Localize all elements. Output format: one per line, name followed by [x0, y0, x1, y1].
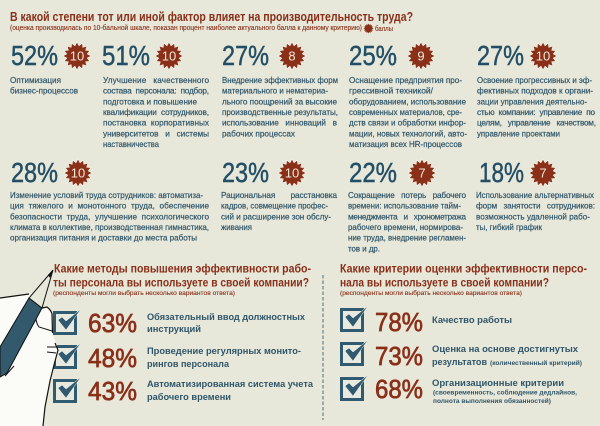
description: дств связи и обработки инфор-	[349, 119, 466, 128]
description: использование инноваций в	[222, 119, 337, 128]
description	[348, 191, 466, 254]
description: Сокращение потерь рабочего	[348, 191, 466, 200]
row: 48%: Проведение регулярных монито-	[147, 346, 301, 357]
row: 48%	[54, 343, 301, 373]
description	[221, 191, 337, 232]
description: университетов и системы	[103, 129, 209, 138]
percentage: 23%	[222, 157, 269, 188]
row: 73%: Оценка на основе достигнутых	[432, 344, 579, 355]
panel: methods	[53, 264, 314, 406]
description: стью компании: управление по	[477, 108, 595, 117]
description: тов и др.	[348, 244, 380, 254]
heading	[53, 264, 311, 290]
description: льного поощрений за высокие	[222, 97, 337, 106]
percentage: 25%	[349, 40, 397, 71]
description: времени: использование тайм-	[348, 202, 461, 211]
description: ты, гибкий график	[476, 223, 542, 232]
badge: score 9: 9	[417, 48, 425, 64]
badge: score 10: 10	[162, 48, 176, 64]
note: (респонденты могли выбрать несколько вариантов ответа)	[53, 289, 235, 297]
row: 73%: (количественный критерий)	[490, 359, 582, 367]
percentage: 52%	[11, 40, 58, 71]
heading: Какие критерии оценки эффективности персо-	[340, 264, 587, 276]
percentage: 18%	[479, 157, 524, 188]
row: 78%	[342, 306, 512, 337]
description: Использование альтернативных	[476, 191, 594, 200]
badge: score 7: 7	[539, 166, 547, 180]
row: 43%	[54, 376, 314, 406]
description: бизнес-процессов	[10, 87, 78, 96]
description	[103, 76, 209, 149]
row: 63%: Обязательный ввод должностных	[147, 312, 306, 323]
percentage: 27%	[477, 40, 524, 71]
description: наставничества	[103, 140, 159, 149]
row: 63%: 63%	[88, 308, 137, 338]
description	[476, 191, 595, 232]
description: сий и расширение зон обслу-	[221, 212, 331, 221]
description: Изменение условий труда сотрудников: автоматиза-	[10, 191, 203, 200]
description: рабочих процессах	[222, 129, 295, 138]
description: живания	[221, 223, 252, 232]
description: зации управления деятельно-	[477, 97, 587, 106]
description: матизация всех HR-процессов	[349, 140, 462, 149]
row: 78%: 78%	[375, 307, 423, 337]
panel: factor 51%	[102, 40, 209, 149]
row: 68%: Организационные критерии	[432, 378, 564, 389]
panel: factor 23%	[221, 157, 337, 232]
description: Внедрение эффективных форм	[222, 76, 338, 85]
description: Рациональная расстановка	[221, 191, 337, 200]
description	[222, 76, 338, 138]
description: мации, новых технологий, авто-	[349, 129, 467, 138]
row: 48%: рингов персонала	[147, 359, 230, 370]
illustration: hand holding pencil	[0, 270, 58, 426]
description: современных материалов, сре-	[349, 108, 462, 117]
row: 68%	[342, 374, 577, 405]
description: Оснащение предприятия про-	[349, 76, 462, 85]
subtitle with score legend	[10, 23, 393, 34]
panel: factor 18%	[476, 157, 595, 232]
badge: score 10	[64, 159, 92, 187]
badge: score 10: 10	[71, 166, 85, 180]
percentage: 28%	[11, 157, 58, 188]
subtitle with score legend: (оценка производилась по 10-бальной шкале, показан процент наиболее актуального балла к данному критерию)	[10, 24, 362, 32]
description	[10, 76, 78, 96]
description: производственные результаты,	[222, 108, 338, 117]
percentage: 22%	[349, 157, 397, 188]
row: 68%: (своевременность, соблюдение дедлайнов,	[433, 388, 577, 396]
row: 43%: рабочего времени	[147, 392, 231, 403]
description: материального и нематериа-	[222, 87, 328, 96]
description: Оптимизация	[10, 76, 61, 85]
description: рабочего времени, нормирова-	[348, 223, 463, 232]
description	[477, 76, 596, 138]
row: 63%	[54, 308, 306, 338]
row: 68%: полнота выполнения обязанностей)	[433, 397, 551, 405]
panel: factor 28%	[10, 157, 209, 243]
row: 73%	[342, 340, 582, 371]
badge: score 10: 10	[536, 48, 550, 64]
description: возможность удаленной рабо-	[476, 212, 590, 221]
description: Улучшение качественного	[103, 76, 209, 85]
description: постановка корпоративных	[103, 119, 209, 128]
heading: ты персонала вы используете в своей компании?	[53, 278, 309, 290]
description	[349, 76, 467, 149]
description: грессивной техникой/	[349, 87, 434, 96]
percentage: 27%	[222, 40, 269, 71]
row: 63%: инструкций	[147, 324, 201, 335]
panel: criteria	[340, 264, 587, 405]
percentage: 51%	[102, 40, 150, 71]
row: 78%: Качество работы	[432, 315, 512, 326]
description: форм занятости сотрудников:	[476, 202, 595, 211]
description: подготовка и повышение	[103, 97, 197, 106]
subtitle with score legend: баллы	[375, 25, 393, 33]
description: состава персонала: подбор,	[103, 87, 209, 96]
panel: factor 22%	[348, 157, 466, 254]
badge: score 10: 10	[285, 166, 299, 180]
panel: factor 27% management approaches	[477, 40, 596, 138]
heading: Какие методы повышения эффективности рабо-	[54, 264, 311, 276]
description: управление проектами	[477, 129, 560, 138]
badge: score 7: 7	[418, 166, 426, 180]
heading: нала вы используете в своей компании?	[340, 278, 549, 290]
row: 48%: 48%	[88, 343, 137, 373]
panel: factor 52%	[10, 40, 91, 96]
row: 68%: 68%	[375, 374, 423, 404]
description: ние труда, внедрение регламен-	[348, 234, 466, 243]
note: (респонденты могли выбрать несколько вариантов ответа)	[340, 289, 522, 297]
title: В какой степени тот или иной фактор влияет на производительность труда?	[10, 9, 413, 24]
description: менеджмента и хронометража	[348, 212, 466, 221]
row: 73%: 73%	[375, 341, 423, 371]
description: ция тяжелого и монотонного труда, обеспечение	[10, 202, 209, 211]
description: оборудованием, использование	[349, 97, 466, 106]
description: кадров, совмещение профес-	[221, 202, 328, 211]
description: организация питания и доставки до места работы	[10, 234, 197, 243]
badge: score 10: 10	[70, 48, 84, 64]
description	[10, 191, 209, 243]
description: квалификации сотрудников,	[103, 108, 209, 117]
panel: factor 27% forms of incentives	[222, 40, 338, 138]
description: целям, управление качеством,	[477, 119, 596, 128]
description: климата в коллективе, производственная гимнастика,	[10, 223, 209, 232]
row: 43%: 43%	[88, 376, 137, 406]
badge: score 8: 8	[288, 48, 296, 64]
row: 43%: Автоматизированная система учета	[147, 379, 314, 390]
panel: factor 25%	[349, 40, 467, 149]
row: 73%: результатов	[432, 357, 487, 368]
description: фективных подходов к органи-	[477, 87, 593, 96]
heading	[340, 264, 587, 290]
description: безопасности труда, улучшение психологического	[10, 212, 209, 221]
description: Освоение прогрессивных и эф-	[477, 76, 592, 85]
